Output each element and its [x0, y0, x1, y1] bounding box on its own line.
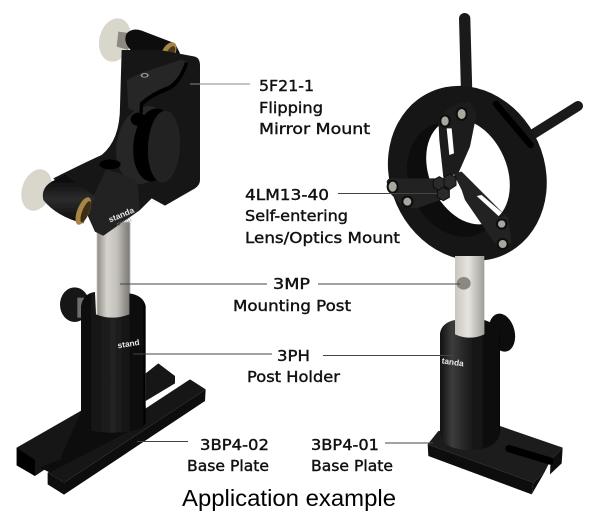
label: 4LM13-40 Self-entering Lens/Optics Mount: Self-entering: [245, 207, 348, 225]
left base plate: [17, 363, 206, 495]
right base plate: [428, 426, 563, 494]
left mounting post: [97, 222, 130, 325]
left holder and base plate: [17, 287, 206, 495]
label: 3BP4-01 Base Plate: [311, 436, 433, 475]
label: 5F21-1 Flipping Mirror Mount: [190, 77, 370, 138]
lens mount rods: [465, 19, 578, 135]
right post holder: [440, 320, 500, 450]
icon: screws: [388, 108, 508, 249]
brand text: standa: tanda: [441, 355, 465, 368]
icon: side rod: [532, 106, 578, 135]
right mounting post: [455, 256, 484, 338]
arm: top: [438, 102, 477, 177]
mirror mount assembly (left, top): [16, 15, 200, 236]
label: 3PH Post Holder: Post Holder: [247, 368, 341, 386]
label: 3MP Mounting Post: [120, 275, 460, 315]
label: 3BP4-01 Base Plate: Base Plate: [311, 457, 393, 475]
label: 5F21-1 Flipping Mirror Mount: 5F21-1: [259, 77, 314, 95]
icon: post hole: [457, 277, 471, 290]
mirror mount body: [53, 50, 200, 236]
label: 3MP Mounting Post: Mounting Post: [233, 297, 351, 315]
label: 5F21-1 Flipping Mirror Mount: Flipping: [259, 99, 323, 117]
lens mount assembly: [360, 60, 574, 286]
left post holder: [81, 292, 146, 433]
label: 5F21-1 Flipping Mirror Mount: Mirror Mount: [259, 120, 370, 138]
brand text: standa: stand: [117, 337, 140, 350]
label: 3BP4-02 Base Plate: 3BP4-02: [200, 436, 269, 454]
label: 3BP4-02 Base Plate: [137, 436, 269, 475]
icon: top spring cylinder: [125, 29, 180, 67]
right clamp knob: [485, 311, 519, 354]
label: 3PH Post Holder: [133, 347, 453, 386]
label: 4LM13-40 Self-entering Lens/Optics Mount: [245, 186, 437, 247]
brand text: standa: standa: [107, 205, 136, 225]
icon: bottom thumb knob: [16, 165, 57, 215]
icon: center hex nuts: [433, 174, 456, 201]
label: 3BP4-02 Base Plate: Base Plate: [187, 457, 269, 475]
caption: Application example: [182, 485, 396, 511]
icon: top thumb knob: [94, 15, 136, 65]
lens mount arms: [387, 102, 512, 249]
lens ring on body: [109, 101, 179, 189]
flip lever: [127, 60, 188, 114]
right post, holder and base plate: [428, 256, 563, 494]
label: 3PH Post Holder: 3PH: [277, 347, 310, 365]
label: 3MP Mounting Post: 3MP: [273, 275, 310, 293]
label: 3BP4-01 Base Plate: 3BP4-01: [311, 436, 379, 454]
icon: bottom spring cylinder: [43, 175, 95, 227]
icon: vertical rod: [465, 19, 467, 93]
serial number: C85311: [116, 217, 133, 228]
label: 4LM13-40 Self-entering Lens/Optics Mount: Lens/Optics Mount: [245, 229, 400, 247]
lower lever: [87, 169, 140, 236]
arm: right: [453, 172, 512, 248]
arm: left: [387, 178, 450, 208]
left clamp knob: [60, 287, 89, 322]
label: 4LM13-40 Self-entering Lens/Optics Mount: 4LM13-40: [245, 186, 329, 204]
lens mount ring: [360, 60, 574, 286]
